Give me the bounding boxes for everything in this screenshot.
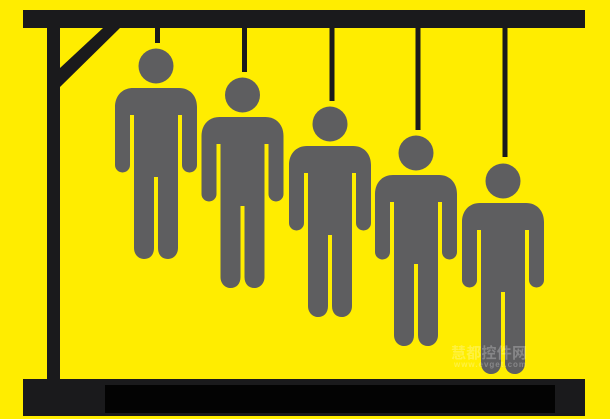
figure 2 — [202, 78, 284, 288]
figure 5 — [462, 164, 544, 374]
watermark: www.evget.com — [453, 360, 526, 369]
figure 3 — [289, 106, 371, 317]
figure 4 — [375, 136, 457, 346]
figure 1 — [115, 48, 197, 259]
ropes — [155, 28, 508, 157]
watermark — [451, 344, 527, 369]
watermark: 慧都控件网 — [451, 344, 527, 362]
